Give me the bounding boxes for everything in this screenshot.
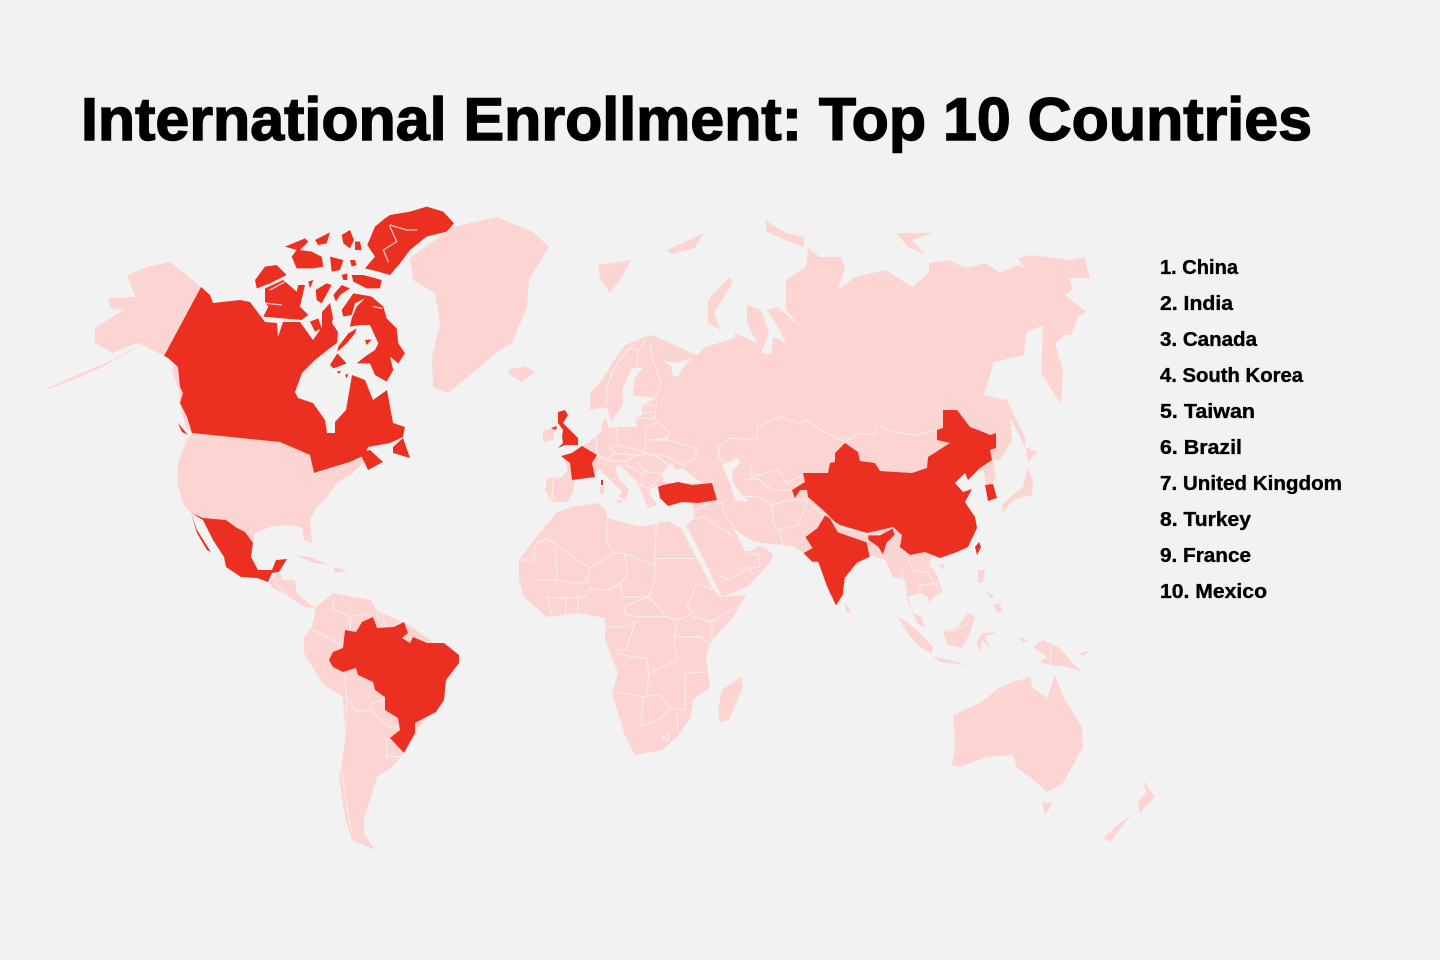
map: country borders — [276, 340, 1051, 833]
Ellesmere — [365, 207, 454, 275]
list item 9: 9. France — [1160, 545, 1251, 567]
list item 3: 3. Canada — [1160, 329, 1258, 351]
list item 1: 1. China — [1160, 257, 1239, 279]
country: Taiwan — [975, 542, 981, 555]
ranked list of countries — [1160, 257, 1342, 603]
list item 4: 4. South Korea — [1160, 365, 1304, 387]
country: Brazil — [329, 617, 459, 753]
country: United Kingdom — [551, 410, 578, 448]
Eurasia landmass — [545, 248, 1090, 628]
list item 8: 8. Turkey — [1160, 509, 1252, 531]
list item 2: 2. India — [1160, 293, 1234, 315]
country: China — [792, 410, 996, 558]
list item 5: 5. Taiwan — [1160, 401, 1255, 423]
country: France — [561, 446, 603, 485]
country: Canada — [164, 207, 454, 473]
country: Turkey — [658, 482, 717, 506]
country: Mexico — [191, 513, 287, 582]
country: South Korea — [985, 484, 997, 501]
map: non-highlighted countries — [40, 217, 1155, 850]
list item 6: 6. Brazil — [1160, 437, 1242, 459]
title: International Enrollment: Top 10 Countries — [81, 86, 1312, 153]
list item 7: 7. United Kingdom — [1160, 473, 1342, 495]
list item 10: 10. Mexico — [1160, 581, 1267, 603]
country: India — [803, 515, 895, 606]
map: inland seas — [600, 358, 748, 502]
world map — [40, 207, 1155, 850]
